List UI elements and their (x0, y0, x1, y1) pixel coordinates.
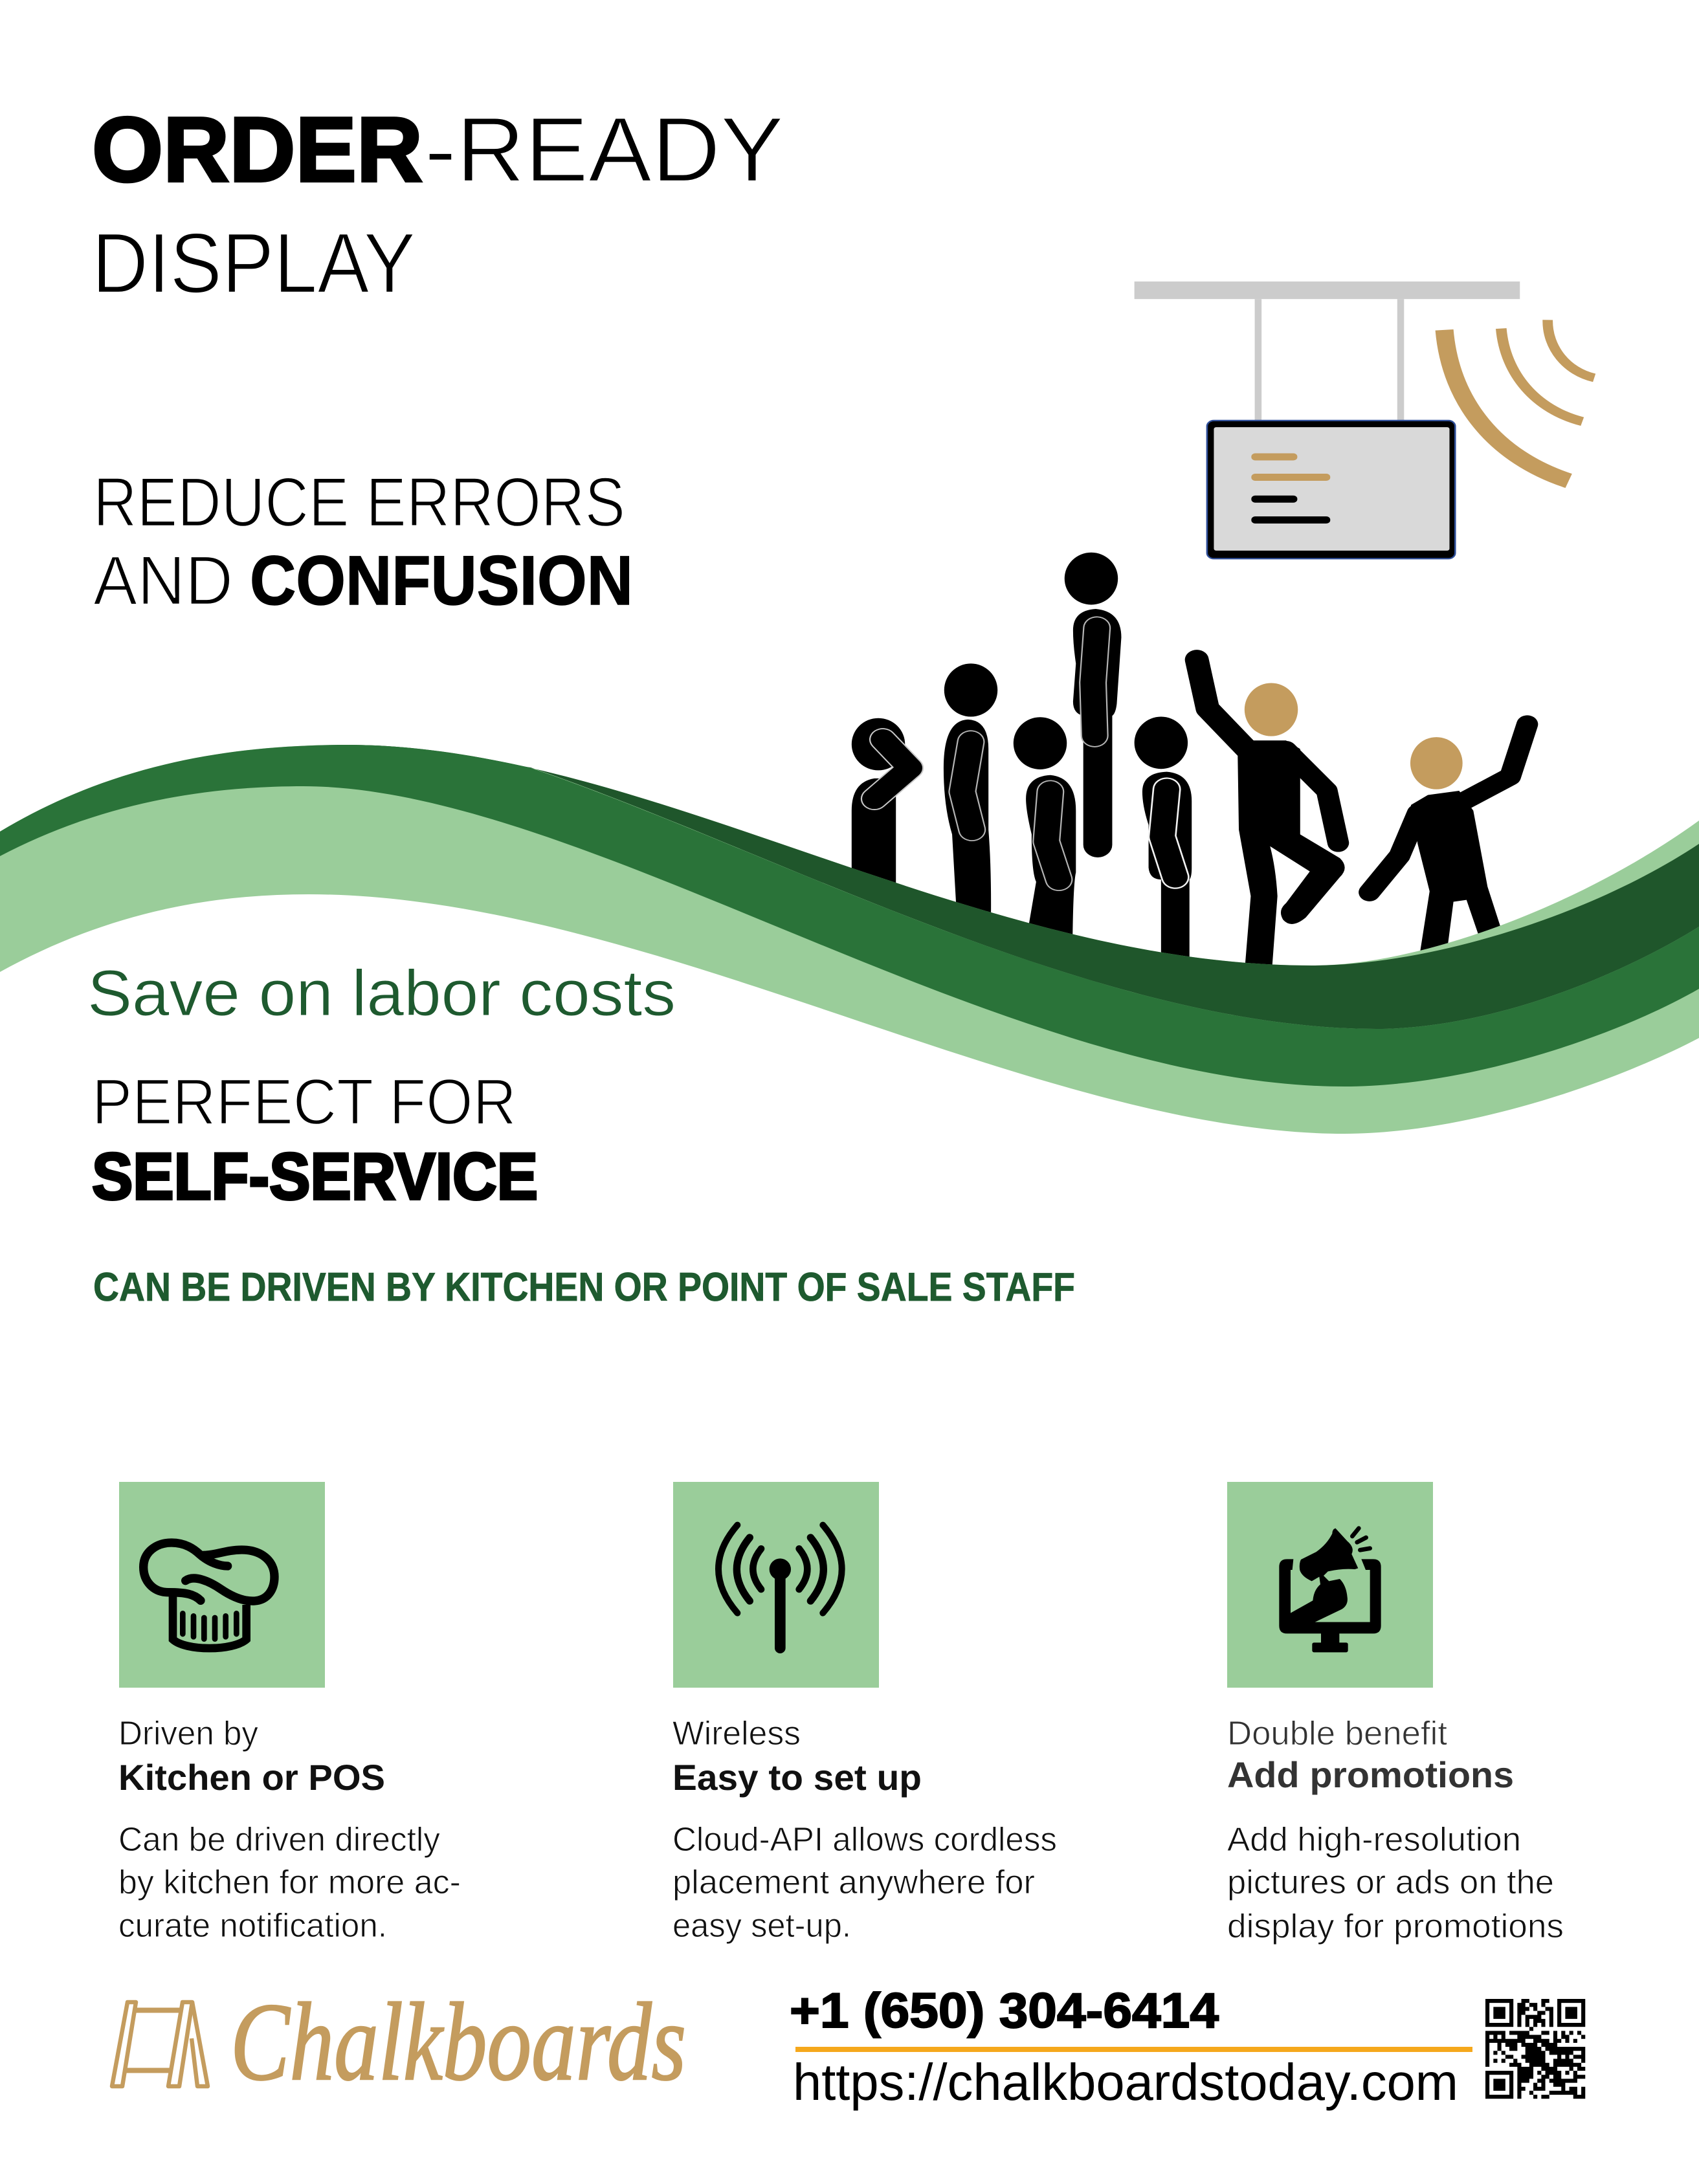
wave band: mid green (0, 745, 1699, 1086)
icon: antenna (673, 1482, 879, 1688)
text: save on labor costs: Save on labor costs (87, 957, 676, 1030)
wave band: dark green (347, 745, 1699, 1029)
illustration: hanging display with signal arcs (1135, 281, 1594, 558)
title: ORDER (92, 98, 423, 201)
contact: website: https://chalkboardstoday.com (793, 2053, 1458, 2111)
subheading: Kitchen or POS (118, 1757, 385, 1798)
subheading: Add promotions (1227, 1754, 1514, 1795)
panel: add promotions (1227, 1482, 1564, 1945)
icon: easel (112, 2002, 208, 2086)
heading: reduce errors and confusion: CONFUSION (250, 541, 633, 619)
person 6: gold head, waving (1197, 660, 1345, 972)
label: Driven by (118, 1715, 258, 1752)
heading: perfect for self-service: PERFECT FOR (92, 1066, 516, 1138)
title: DISPLAY (92, 215, 416, 311)
body text: placement anywhere for (672, 1864, 1035, 1901)
body text: pictures or ads on the (1227, 1864, 1554, 1901)
contact: phone number: +1 (650) 304-6414 (790, 1983, 1219, 2038)
body text: Cloud-API allows cordless (672, 1821, 1057, 1859)
wordmark: Chalkboards (230, 1981, 686, 2104)
person 1 (852, 718, 910, 910)
heading: reduce errors and confusion: AND (93, 541, 233, 619)
panel: driven by kitchen or POS (118, 1482, 461, 1945)
signal arcs (1445, 320, 1594, 481)
body text: curate notification. (118, 1907, 387, 1945)
label: Wireless (672, 1715, 801, 1752)
title (92, 98, 784, 311)
heading: reduce errors and confusion: REDUCE ERRORS (93, 463, 625, 541)
title: -READY (425, 98, 784, 201)
body text: easy set-up. (672, 1907, 851, 1945)
body text (118, 1821, 461, 1945)
body text (672, 1821, 1057, 1945)
person 2 (944, 663, 997, 934)
display screen (1207, 421, 1455, 558)
panel: wireless (672, 1482, 1057, 1945)
heading: reduce errors and confusion (93, 463, 633, 619)
QR code (1485, 2001, 1585, 2097)
icon: megaphone from monitor (1227, 1482, 1433, 1688)
person 4 (1065, 553, 1121, 857)
body text: by kitchen for more ac- (118, 1864, 461, 1901)
body text (1227, 1821, 1564, 1945)
logo: chalkboards (112, 1981, 686, 2104)
person 5 (1135, 717, 1192, 967)
heading: perfect for self-service: SELF-SERVICE (92, 1140, 538, 1213)
person 3 (1014, 717, 1076, 948)
label: Double benefit (1227, 1715, 1448, 1752)
body text: display for promotions (1227, 1908, 1564, 1945)
icon: chef hat (119, 1482, 325, 1688)
wave band: light green (0, 745, 1699, 1134)
illustration: queue of people (852, 553, 1527, 972)
heading: perfect for self-service (92, 1066, 538, 1213)
text: green strapline: CAN BE DRIVEN BY KITCHEN OR POINT OF SALE STAFF (93, 1265, 1075, 1310)
ceiling mount (1135, 281, 1520, 421)
divider line (795, 2047, 1472, 2052)
body text: Can be driven directly (118, 1821, 440, 1859)
subheading: Easy to set up (672, 1757, 922, 1798)
body text: Add high-resolution (1227, 1821, 1521, 1859)
person 7: gold head, waving (1370, 724, 1527, 967)
